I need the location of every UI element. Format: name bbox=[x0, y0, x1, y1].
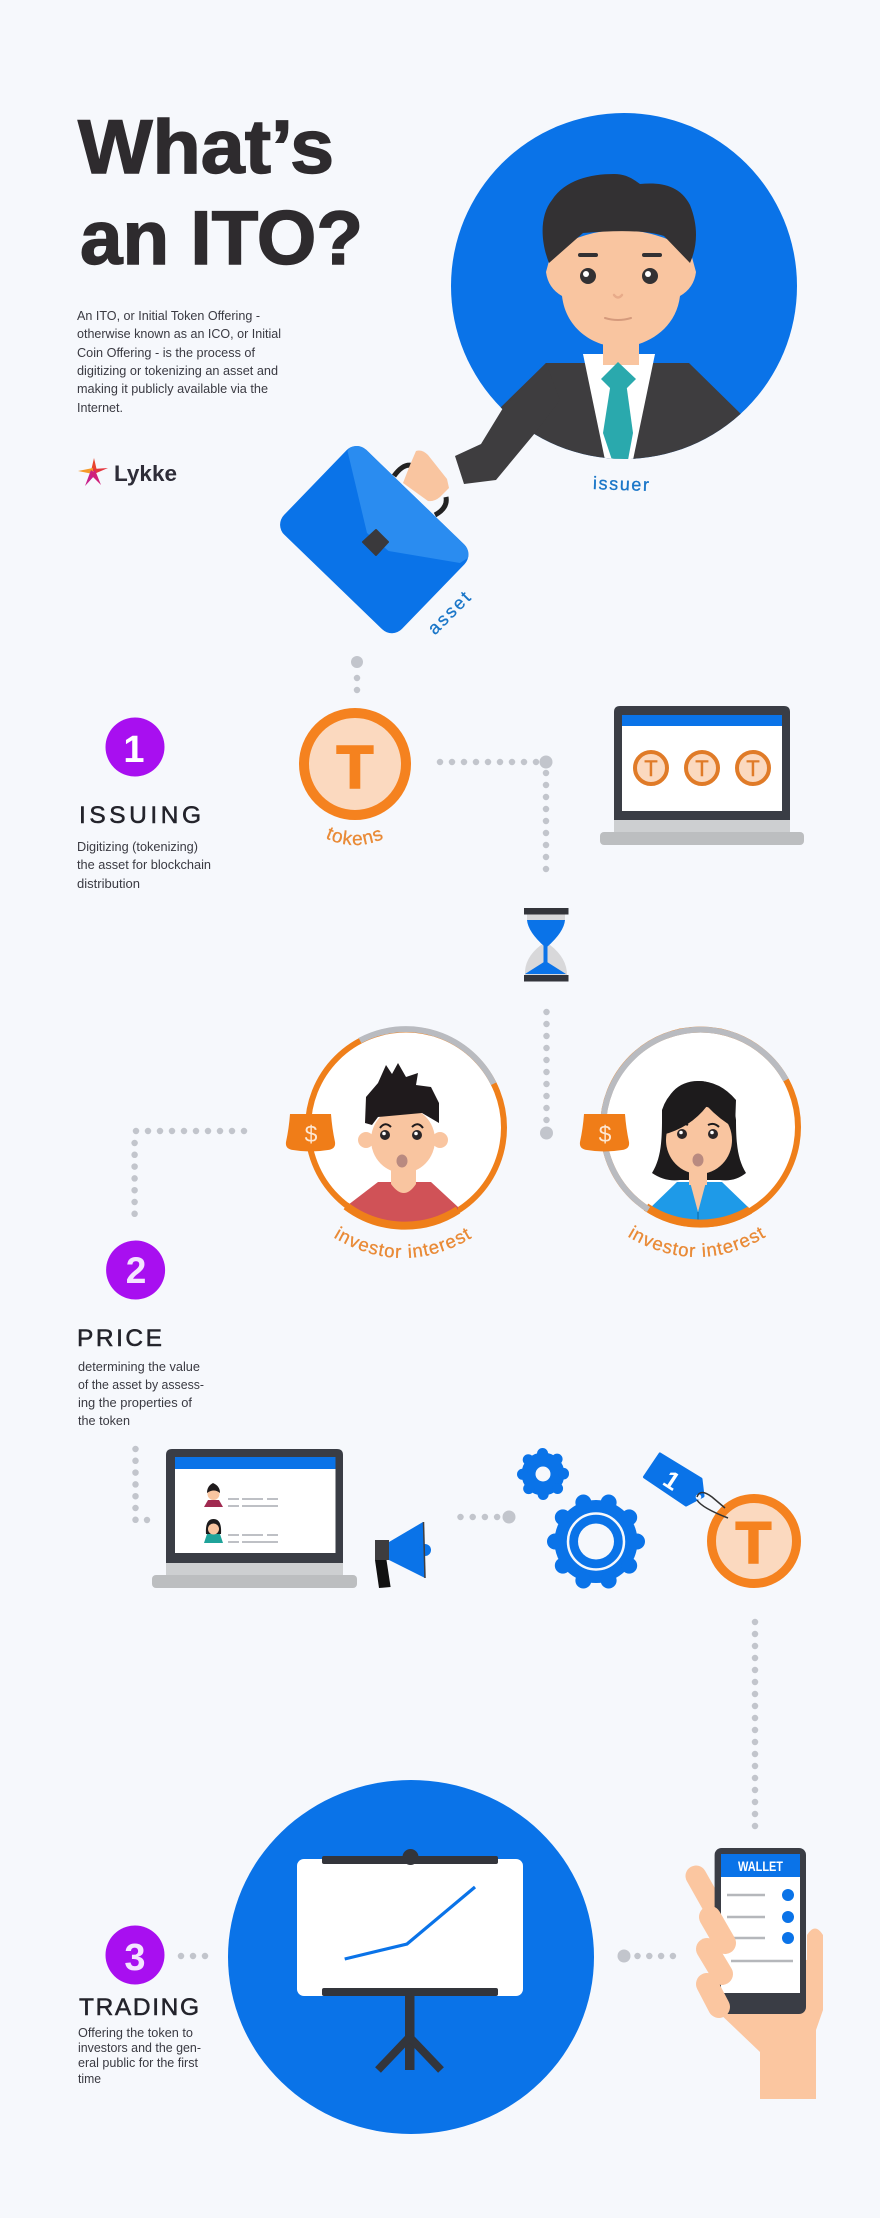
step 2 number badge: 2 bbox=[126, 1250, 146, 1291]
male investor figure bbox=[348, 1063, 458, 1230]
mini investor 2 bbox=[204, 1519, 223, 1543]
step 2 description: the token bbox=[78, 1414, 130, 1428]
icon: mini coins: T bbox=[746, 756, 760, 781]
investor 1 bbox=[286, 1029, 504, 1230]
title bbox=[78, 105, 363, 281]
icon: small gear bbox=[522, 1452, 564, 1496]
intro text block: Coin Offering - is the process of bbox=[77, 346, 256, 360]
phone body bbox=[715, 1848, 806, 2014]
icon: token with price tag: T bbox=[736, 1511, 771, 1576]
step 2 number badge bbox=[106, 1240, 165, 1300]
step 3 heading: TRADING bbox=[79, 1994, 199, 2021]
icon: purse with dollar: $ bbox=[599, 1121, 612, 1147]
icon: briefcase asset bbox=[280, 446, 468, 634]
label: investor interest: investor interest bbox=[334, 1226, 472, 1258]
fingers bbox=[707, 1917, 725, 2007]
ring and portrait circle bbox=[603, 1030, 798, 1224]
investor 2 bbox=[580, 1030, 798, 1230]
intro text block: An ITO, or Initial Token Offering - bbox=[77, 309, 260, 323]
dotted connector: price to laptop bbox=[136, 1449, 150, 1523]
icon: purse with dollar bbox=[580, 1114, 629, 1152]
icon: token with price tag: 1 bbox=[658, 1465, 685, 1496]
intro text block bbox=[77, 309, 281, 415]
female investor figure bbox=[652, 1081, 749, 1220]
step 1 description: Digitizing (tokenizing) bbox=[77, 840, 198, 854]
Lykke logo bbox=[78, 458, 177, 486]
blue circle with presentation board bbox=[228, 1780, 594, 2134]
icon: token with price tag bbox=[644, 1454, 796, 1584]
intro text block: otherwise known as an ICO, or Initial bbox=[77, 327, 281, 341]
icon: laptop with tokens bbox=[600, 706, 804, 845]
hand holding wallet phone bbox=[696, 1848, 823, 2099]
step 3 description: investors and the gen- bbox=[78, 2041, 201, 2055]
step 1 description: distribution bbox=[77, 877, 140, 891]
step 1 description bbox=[77, 840, 211, 891]
label: tokens: tokens bbox=[326, 827, 383, 846]
step 3 number badge: 3 bbox=[124, 1937, 146, 1979]
step 1 heading: ISSUING bbox=[79, 802, 201, 829]
mini investor 1 bbox=[204, 1483, 223, 1507]
step 2 heading: PRICE bbox=[77, 1325, 162, 1352]
ring and portrait circle bbox=[308, 1030, 504, 1226]
dotted connector: tokens to hourglass bbox=[440, 756, 552, 870]
step 3 number badge bbox=[106, 1926, 164, 1984]
blue circle background bbox=[451, 113, 797, 459]
dotted connector: asset to tokens bbox=[351, 656, 363, 691]
step 1 number badge: 1 bbox=[123, 729, 145, 771]
phone screen bbox=[721, 1854, 800, 1993]
icon: token coin bbox=[304, 713, 406, 815]
step 3 description: eral public for the first bbox=[78, 2056, 199, 2070]
step 2 description bbox=[78, 1360, 204, 1428]
label: asset: asset bbox=[424, 588, 474, 638]
intro text block: digitizing or tokenizing an asset and bbox=[77, 364, 278, 378]
icon: token coin: T bbox=[337, 734, 373, 801]
step 2 description: determining the value bbox=[78, 1360, 200, 1374]
mini text lines bbox=[228, 1499, 278, 1542]
step 1 description: the asset for blockchain bbox=[77, 858, 211, 872]
dotted connector: badge to circle bbox=[181, 1953, 206, 1959]
icon: logo star bbox=[78, 458, 108, 486]
issuer illustration bbox=[451, 113, 797, 495]
presentation board bbox=[297, 1849, 523, 2070]
step 2 description: ing the properties of bbox=[78, 1396, 193, 1410]
step 3 description: Offering the token to bbox=[78, 2026, 193, 2040]
step 3 description bbox=[78, 2026, 201, 2086]
price tag bbox=[644, 1454, 703, 1505]
icon: megaphone bbox=[375, 1522, 431, 1588]
dotted connector: token to wallet bbox=[752, 1622, 758, 1827]
icon: mini coins: T bbox=[644, 756, 658, 781]
Lykke logo: Lykke bbox=[114, 461, 177, 486]
hand palm and thumb bbox=[696, 1876, 823, 2099]
icon: hourglass bbox=[524, 908, 568, 982]
intro text block: Internet. bbox=[77, 401, 123, 415]
icon: mini coins: T bbox=[695, 756, 709, 781]
dotted connector: megaphone to gears bbox=[460, 1510, 516, 1524]
chart line bbox=[345, 1887, 475, 1959]
label: issuer: issuer bbox=[593, 473, 649, 495]
title: an ITO? bbox=[80, 196, 363, 281]
intro text block: making it publicly available via the bbox=[77, 382, 268, 396]
icon: mini coins bbox=[635, 752, 769, 784]
dotted connector: hourglass to investors bbox=[540, 1012, 553, 1140]
icon: purse with dollar bbox=[286, 1114, 335, 1152]
issuer person bbox=[455, 174, 745, 484]
dotted connector: circle to wallet bbox=[618, 1950, 674, 1962]
title: What’s bbox=[78, 105, 334, 190]
dotted connector: investors to price bbox=[135, 1131, 244, 1214]
step 3 description: time bbox=[78, 2072, 101, 2086]
step 2 description: of the asset by assess- bbox=[78, 1378, 204, 1392]
label: investor interest: investor interest bbox=[628, 1225, 766, 1257]
icon: large gear bbox=[554, 1500, 638, 1583]
step 1 number badge bbox=[106, 718, 164, 776]
icon: purse with dollar: $ bbox=[305, 1121, 318, 1147]
phone screen: WALLET bbox=[738, 1859, 784, 1874]
icon: laptop with investors bbox=[152, 1449, 357, 1588]
